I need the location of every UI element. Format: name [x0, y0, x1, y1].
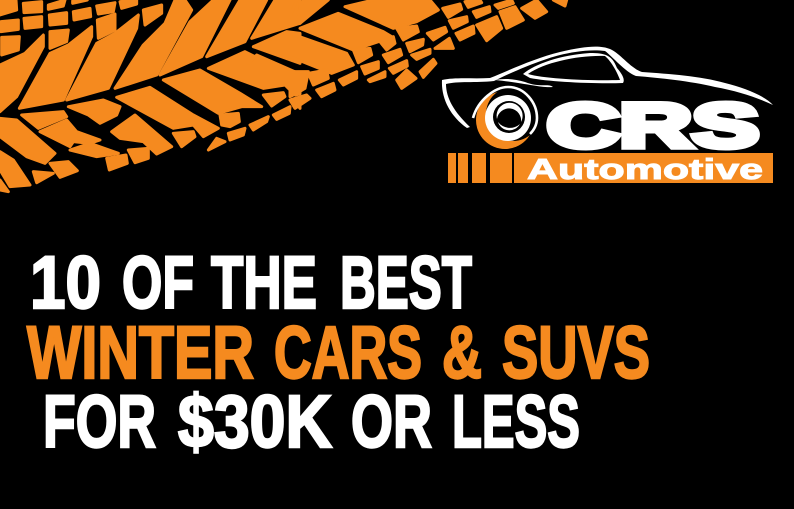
CRS wordmark: CRS — [547, 92, 759, 161]
title line 1: THE — [211, 241, 317, 324]
title line 1: OF — [122, 241, 194, 324]
title line 3: FOR — [43, 380, 156, 463]
stripes — [448, 153, 773, 183]
title line 3 — [43, 380, 580, 463]
title line 3: OR — [351, 380, 432, 463]
car outline — [442, 47, 773, 128]
title line 2 — [27, 311, 650, 394]
title line 1 — [30, 241, 472, 324]
title line 2: CARS — [274, 311, 422, 394]
title line 2: SUVS — [502, 311, 650, 394]
title line 3: $30K — [178, 380, 332, 463]
title line 3: LESS — [452, 380, 580, 463]
wheel — [473, 87, 540, 149]
Automotive label: Automotive — [527, 154, 763, 186]
title line 2: & — [442, 311, 482, 394]
title line 1: 10 — [30, 241, 101, 324]
title line 2: WINTER — [27, 311, 254, 394]
tire tread graphic — [0, 0, 567, 192]
logo: CRS Automotive — [442, 47, 773, 186]
title line 1: BEST — [340, 241, 472, 324]
